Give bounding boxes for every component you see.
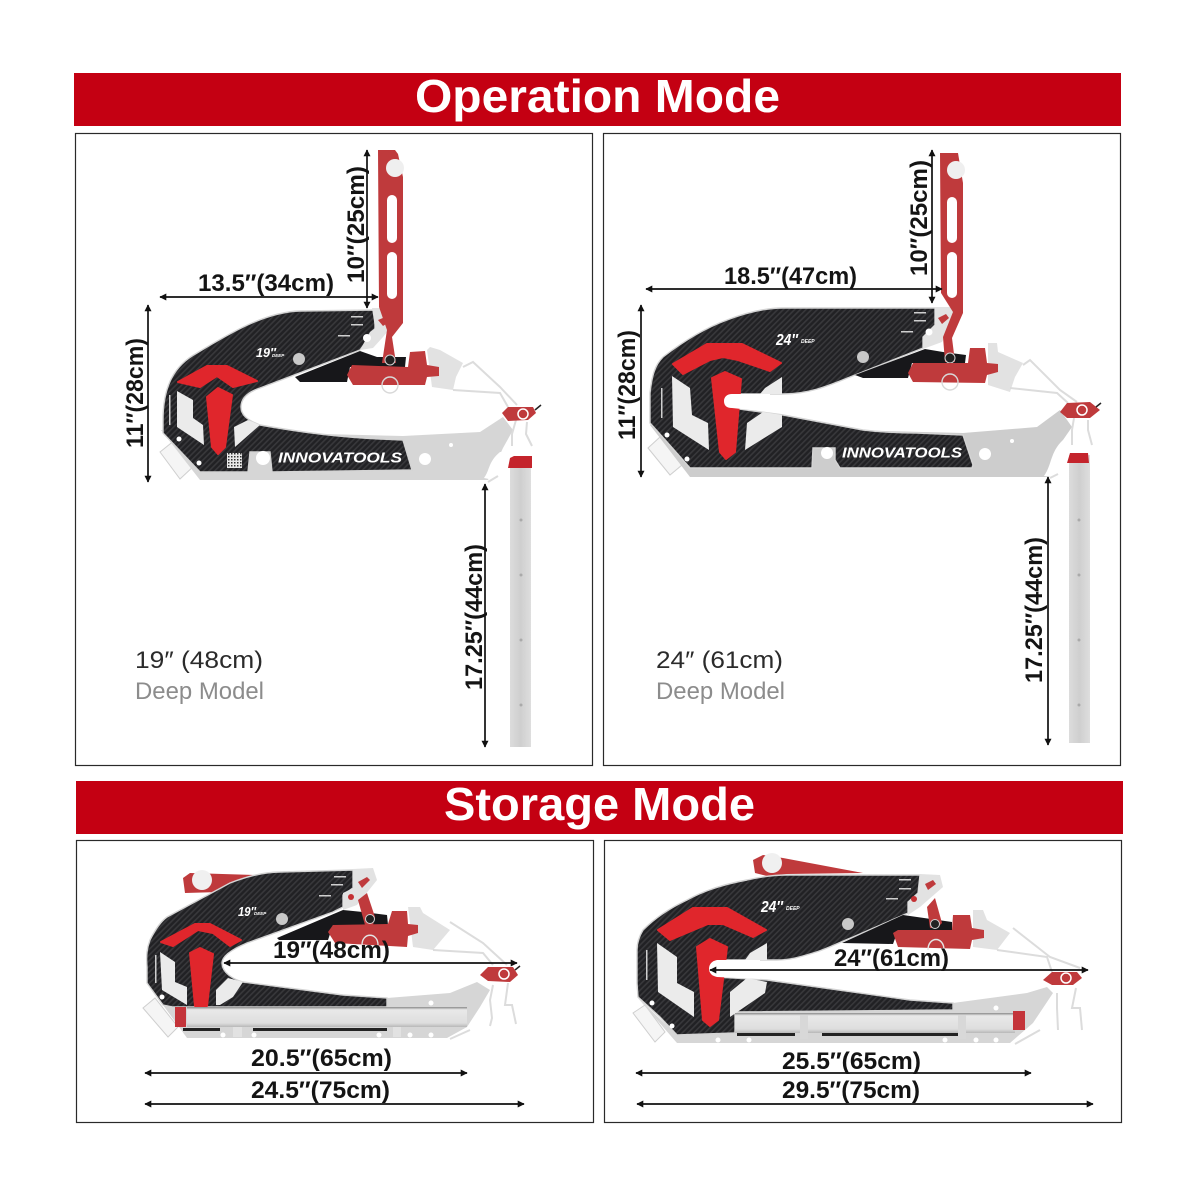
logo: [657, 908, 767, 1026]
model label: 19″ (48cm): [135, 647, 263, 674]
depth badge: [760, 899, 800, 916]
dimension: 13.5 inch: 13.5″(34cm): [198, 270, 334, 297]
clamp: [328, 911, 418, 947]
depth badge: DEEP: [254, 911, 267, 916]
depth badge: 19″: [256, 345, 277, 360]
red tag: [1060, 402, 1100, 418]
dimension: 24 inch: 24″(61cm): [834, 945, 949, 972]
depth badge: DEEP: [801, 339, 815, 345]
panel: operation mode 24 inch model: [604, 134, 1120, 766]
dimension: 17.25 inch: 17.25″(44cm): [1021, 537, 1048, 683]
handle folded: [753, 853, 863, 876]
dimension: 10 inch: 10″(25cm): [343, 166, 370, 283]
tool: 24 inch cutter in storage mode: [633, 853, 1082, 1044]
dimension: 11 inch: 11″(28cm): [614, 330, 641, 440]
depth badge: 24″: [760, 899, 784, 916]
tool: 19 inch cutter in storage mode: [143, 868, 520, 1039]
pole: [508, 456, 532, 747]
model label: [135, 647, 264, 705]
model label: Deep Model: [656, 678, 785, 705]
dimension: 24.5 inch: 24.5″(75cm): [251, 1077, 390, 1104]
depth badge: 19″: [238, 904, 257, 919]
depth badge: [775, 332, 815, 349]
brand text: INNOVATOOLS: [278, 450, 402, 466]
logo: [160, 924, 243, 1006]
dimension: 11 inch: 11″(28cm): [122, 338, 149, 448]
dimension: 25.5 inch: 25.5″(65cm): [782, 1048, 921, 1075]
heading: Storage Mode: [76, 778, 1123, 834]
logo: [177, 366, 260, 454]
dimension: 18.5 inch: 18.5″(47cm): [724, 263, 857, 290]
dimension: 29.5 inch: 29.5″(75cm): [782, 1077, 920, 1104]
dimension: 19 inch: 19″(48cm): [273, 937, 390, 964]
dimension: 17.25 inch: 17.25″(44cm): [461, 544, 488, 690]
QR code: [227, 453, 242, 468]
depth badge: DEEP: [786, 906, 800, 912]
folded rail: [735, 1011, 1025, 1039]
handle: [378, 150, 404, 363]
depth badge: DEEP: [272, 353, 285, 358]
brand text: INNOVATOOLS: [842, 444, 962, 462]
heading: Operation Mode: Operation Mode: [415, 70, 780, 122]
dimension: 10 inch: 10″(25cm): [906, 160, 933, 276]
folded rail: [175, 1007, 467, 1037]
clamp: [908, 348, 998, 383]
red tag: [502, 407, 536, 421]
model label: 24″ (61cm): [656, 647, 783, 674]
panel: storage mode 24 inch model: [604, 840, 1122, 1122]
clamp: [347, 351, 439, 385]
model label: [656, 647, 785, 705]
panel: operation mode 19 inch model: [76, 134, 592, 766]
tool: 19 inch cutter in operation mode: [160, 150, 541, 747]
heading: Operation Mode: [74, 70, 1121, 126]
handle folded: [183, 870, 257, 893]
pole: [1067, 453, 1090, 743]
red tag: [480, 967, 518, 982]
red tag: [1043, 972, 1082, 985]
dimension: 20.5 inch: 20.5″(65cm): [251, 1045, 392, 1072]
tool: 24 inch cutter in operation mode: [648, 153, 1101, 743]
clamp: [893, 915, 984, 949]
panel: storage mode 19 inch model: [76, 840, 594, 1122]
heading: Storage Mode: Storage Mode: [444, 778, 755, 830]
logo: [672, 344, 782, 459]
handle: [940, 153, 965, 362]
depth badge: 24″: [775, 332, 799, 349]
model label: Deep Model: [135, 678, 264, 705]
